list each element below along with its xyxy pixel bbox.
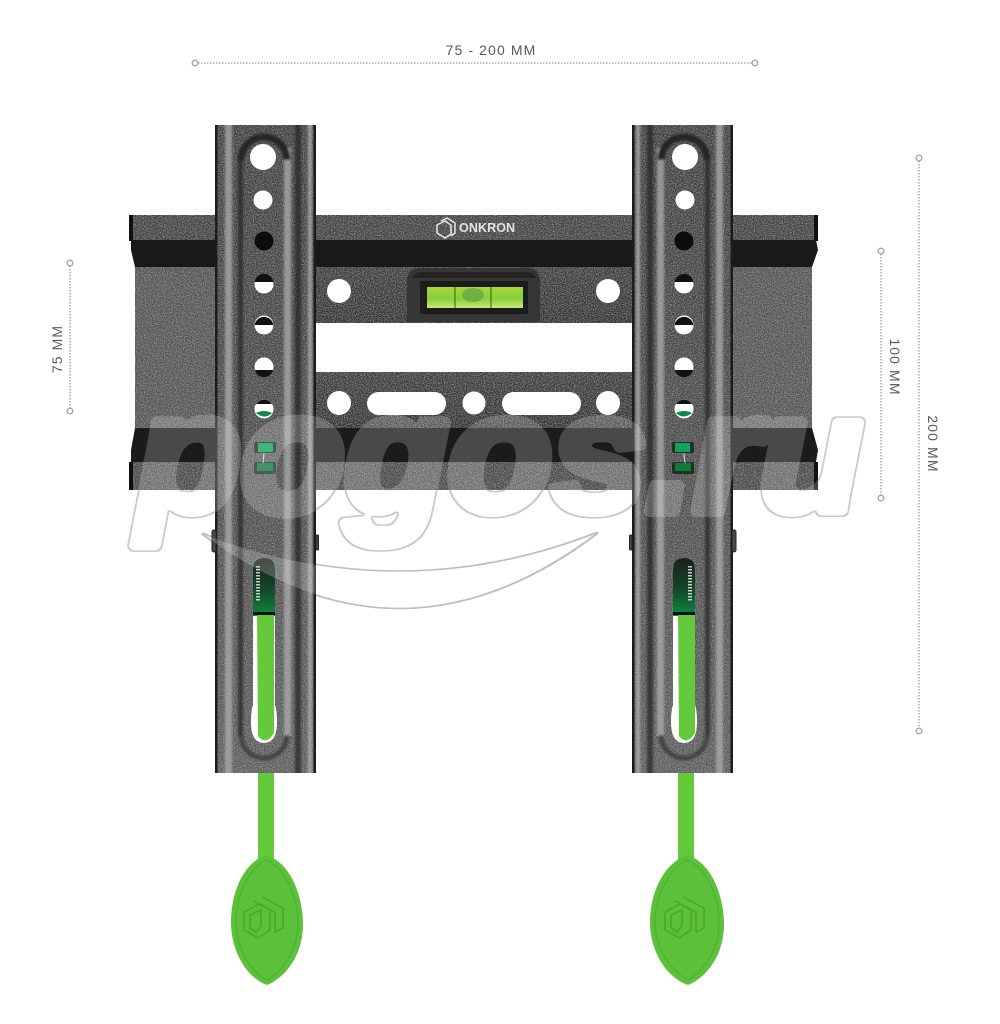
dimension: right 200 mm: 200 MM bbox=[925, 415, 941, 473]
mounting holes bbox=[250, 144, 276, 418]
adjustment slot right bbox=[671, 558, 697, 743]
right bracket bbox=[630, 115, 736, 783]
bubble level bbox=[407, 268, 540, 322]
dimension: left 75 mm bbox=[49, 260, 73, 414]
dimension: top width 75-200 mm bbox=[192, 42, 758, 66]
watermark outline on background: pogos.ru bbox=[133, 359, 863, 547]
adjustment slot bbox=[251, 558, 277, 743]
right green tether bbox=[650, 615, 724, 985]
dimension: left 75 mm: 75 MM bbox=[49, 325, 65, 373]
green clip window bbox=[254, 442, 276, 474]
left green leaf tab bbox=[231, 855, 303, 985]
right green leaf tab bbox=[650, 855, 724, 985]
watermark: pogos.ru: pogos.ru bbox=[133, 359, 863, 547]
dimension: right 100 mm: 100 MM bbox=[887, 338, 903, 396]
plate holes and slots bbox=[327, 279, 620, 415]
left bracket bbox=[212, 115, 318, 783]
left green tether bbox=[231, 615, 303, 985]
central window bbox=[316, 323, 632, 372]
mounting holes right bbox=[672, 144, 698, 418]
back plate bbox=[129, 215, 818, 490]
dimension: right 200 mm bbox=[916, 155, 941, 734]
ONKRON logo bbox=[437, 218, 515, 238]
dimension: right 100 mm bbox=[878, 248, 903, 501]
ONKRON logo: ONKRON bbox=[459, 221, 515, 235]
side pin bbox=[212, 530, 318, 552]
green clip window right bbox=[672, 442, 694, 474]
side pin right bbox=[630, 530, 736, 552]
dimension: top width 75-200 mm: 75 - 200 MM bbox=[446, 42, 536, 58]
